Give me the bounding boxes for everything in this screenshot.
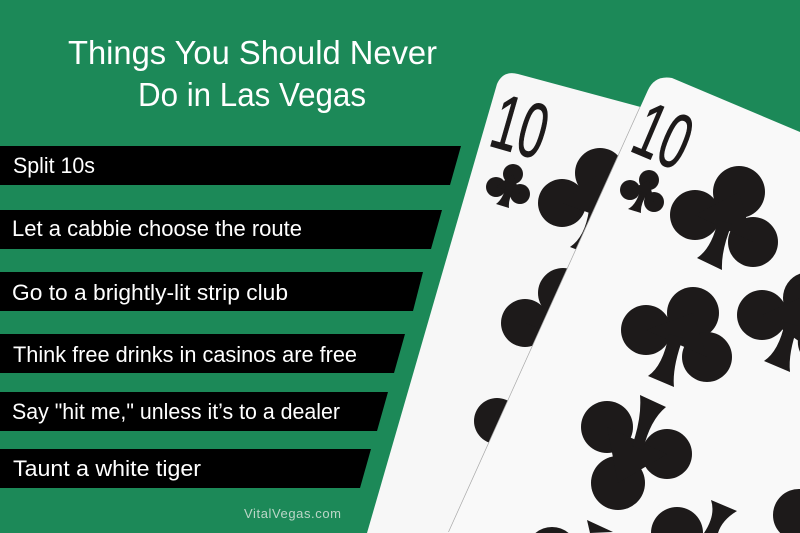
panel: back playing card [367, 73, 700, 533]
list bar: cabbie: Let a cabbie choose the route [12, 216, 302, 241]
panel: front playing card [448, 78, 800, 533]
back card rank: 10 [482, 77, 558, 176]
back card large club [538, 148, 641, 257]
list bar: split 10s [0, 146, 461, 185]
back card small club [486, 164, 530, 208]
list bar: hit me [0, 392, 388, 431]
list bar: white tiger: Taunt a white tiger [13, 456, 202, 481]
club one [670, 166, 778, 270]
title: Do in Las Vegas [138, 76, 366, 113]
club two [621, 287, 732, 387]
list bar: strip club: Go to a brightly-lit strip club [12, 280, 288, 305]
title: Things You Should Never [68, 34, 437, 71]
list bar: white tiger [0, 449, 371, 488]
list bar: cabbie [0, 210, 442, 249]
front card rank: 10 [621, 85, 705, 187]
list bar: free drinks: Think free drinks in casinos are free [13, 342, 357, 367]
source credit: VitalVegas.com [244, 506, 341, 521]
club seven [535, 520, 613, 533]
list bar: hit me: Say "hit me," unless it’s to a dealer [12, 399, 340, 424]
club three [737, 274, 800, 372]
list bar: split 10s: Split 10s [13, 153, 95, 178]
club six [773, 489, 800, 533]
list bar: strip club [0, 272, 423, 311]
list bar: free drinks [0, 334, 405, 373]
title [68, 34, 437, 113]
back card middle club [501, 268, 588, 347]
back card lower club [474, 398, 520, 444]
club five [651, 500, 737, 533]
front card small club [620, 170, 664, 213]
club four [581, 395, 692, 510]
